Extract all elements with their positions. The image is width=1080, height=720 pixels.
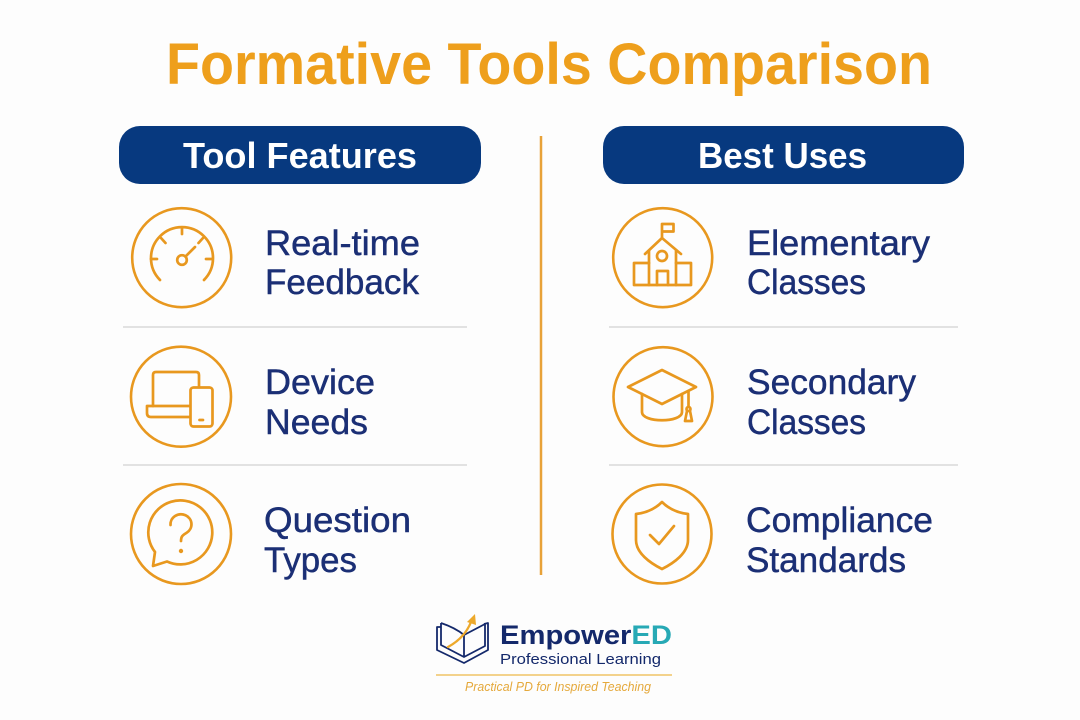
- label: needs: Needs: [265, 403, 368, 442]
- icon: school building: [613, 208, 712, 307]
- label: classes: Classes: [747, 263, 866, 302]
- label: question: Question: [264, 501, 411, 540]
- heading: tool features: [119, 126, 481, 184]
- label: real-time: Real-time: [265, 224, 420, 263]
- label: compliance: Compliance: [746, 501, 933, 540]
- icon: graduation cap: [614, 347, 712, 446]
- subtitle: Professional Learning: [500, 651, 661, 668]
- icon: laptop and phone: [131, 347, 231, 447]
- icon: speedometer gauge: [132, 208, 231, 307]
- label: classes: Classes: [747, 403, 866, 442]
- heading: best uses: Best Uses: [698, 135, 867, 176]
- label: secondary: Secondary: [747, 363, 917, 402]
- logo: EmpowerED: [436, 614, 672, 694]
- title: Formative Tools Comparison: [166, 32, 932, 97]
- label: device: Device: [265, 363, 375, 402]
- panel: best uses: [603, 126, 964, 584]
- label: types: Types: [264, 541, 357, 580]
- label: elementary: Elementary: [747, 224, 931, 263]
- icon: question speech bubble: [131, 484, 231, 584]
- center divider: [540, 136, 542, 575]
- heading: tool features: Tool Features: [183, 135, 417, 176]
- heading: best uses: [603, 126, 964, 184]
- icon: open book with arrow: [437, 614, 488, 663]
- icon: shield with check: [612, 484, 712, 584]
- wordmark: Empower ED: [500, 620, 672, 650]
- label: feedback: Feedback: [265, 263, 419, 302]
- tagline: Practical PD for Inspired Teaching: [465, 680, 651, 694]
- panel: tool features: [119, 126, 481, 584]
- label: standards: Standards: [746, 541, 906, 580]
